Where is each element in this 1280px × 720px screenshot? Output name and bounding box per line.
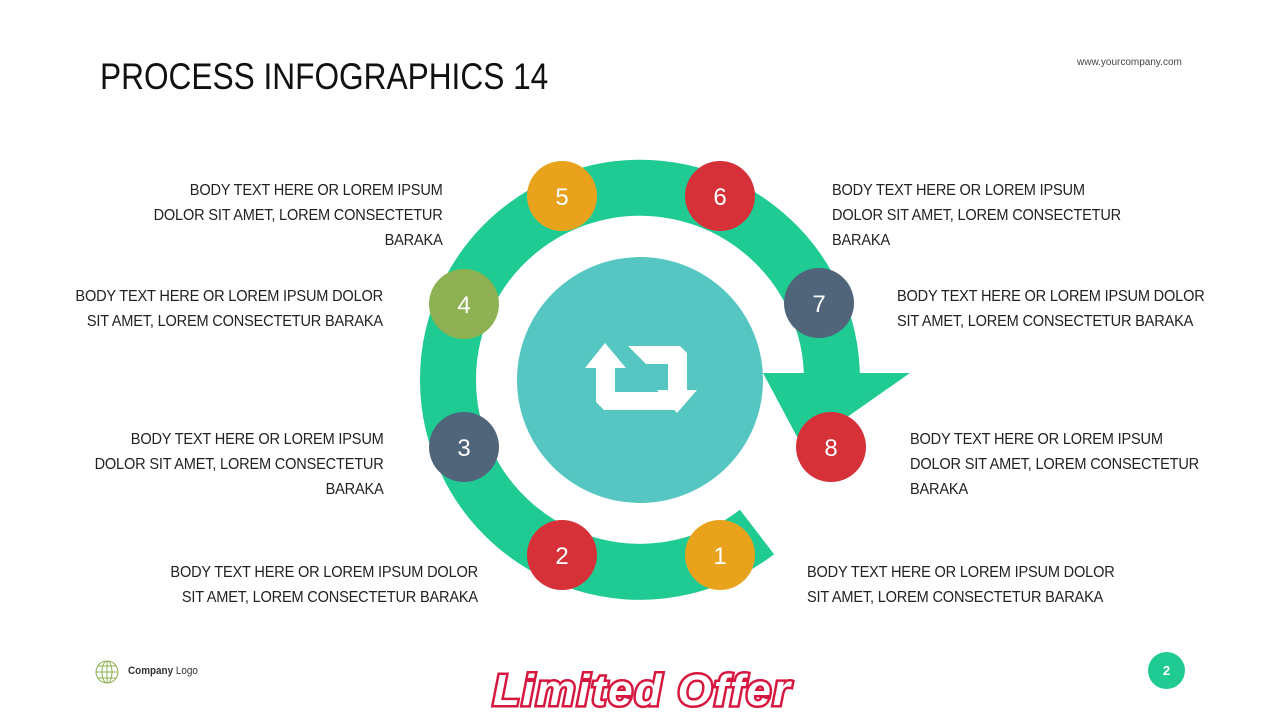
step circles: 4 (457, 292, 471, 319)
text 3: DOLOR SIT AMET, LOREM CONSECTETUR (95, 456, 384, 473)
text 4: SIT AMET, LOREM CONSECTETUR BARAKA (87, 313, 383, 330)
text 1: SIT AMET, LOREM CONSECTETUR BARAKA (807, 589, 1103, 606)
text 3: BARAKA (326, 481, 384, 498)
text 6: DOLOR SIT AMET, LOREM CONSECTETUR (832, 207, 1121, 224)
text 5 (154, 182, 443, 249)
limited offer banner: Limited Offer (493, 666, 792, 715)
text 7 (897, 288, 1205, 330)
page number: 2 (1163, 663, 1170, 678)
text 4: BODY TEXT HERE OR LOREM IPSUM DOLOR (75, 288, 383, 305)
step circles (429, 161, 866, 590)
text 8: BODY TEXT HERE OR LOREM IPSUM (910, 431, 1163, 448)
step circles: 5 (555, 184, 569, 211)
text 5: BODY TEXT HERE OR LOREM IPSUM (190, 182, 443, 199)
text 7: BODY TEXT HERE OR LOREM IPSUM DOLOR (897, 288, 1205, 305)
ring arrow (448, 188, 910, 572)
text 1 (807, 564, 1115, 606)
text 6: BARAKA (832, 232, 890, 249)
step circles: 1 (713, 543, 727, 570)
text 8 (910, 431, 1199, 498)
text 4 (75, 288, 383, 330)
page number (1148, 652, 1185, 689)
text 8: BARAKA (910, 481, 968, 498)
text 3: BODY TEXT HERE OR LOREM IPSUM (131, 431, 384, 448)
title: PROCESS INFOGRAPHICS 14 (100, 56, 548, 97)
text 3 (95, 431, 384, 498)
company logo (96, 660, 198, 684)
step circles: 6 (713, 184, 727, 211)
text 8: DOLOR SIT AMET, LOREM CONSECTETUR (910, 456, 1199, 473)
text 5: BARAKA (385, 232, 443, 249)
text 5: DOLOR SIT AMET, LOREM CONSECTETUR (154, 207, 443, 224)
text 7: SIT AMET, LOREM CONSECTETUR BARAKA (897, 313, 1193, 330)
text 1: BODY TEXT HERE OR LOREM IPSUM DOLOR (807, 564, 1115, 581)
text 2 (170, 564, 478, 606)
step circles: 8 (824, 435, 838, 462)
icon: repeat (585, 343, 697, 413)
step circles: 2 (555, 543, 569, 570)
company logo: Company Logo (128, 665, 198, 677)
text 6: BODY TEXT HERE OR LOREM IPSUM (832, 182, 1085, 199)
center circle (517, 257, 763, 503)
text 2: BODY TEXT HERE OR LOREM IPSUM DOLOR (170, 564, 478, 581)
step circles: 7 (812, 291, 826, 318)
step circles: 3 (457, 435, 471, 462)
text 6 (832, 182, 1121, 249)
text 2: SIT AMET, LOREM CONSECTETUR BARAKA (182, 589, 478, 606)
website: www.yourcompany.com (1077, 57, 1182, 68)
